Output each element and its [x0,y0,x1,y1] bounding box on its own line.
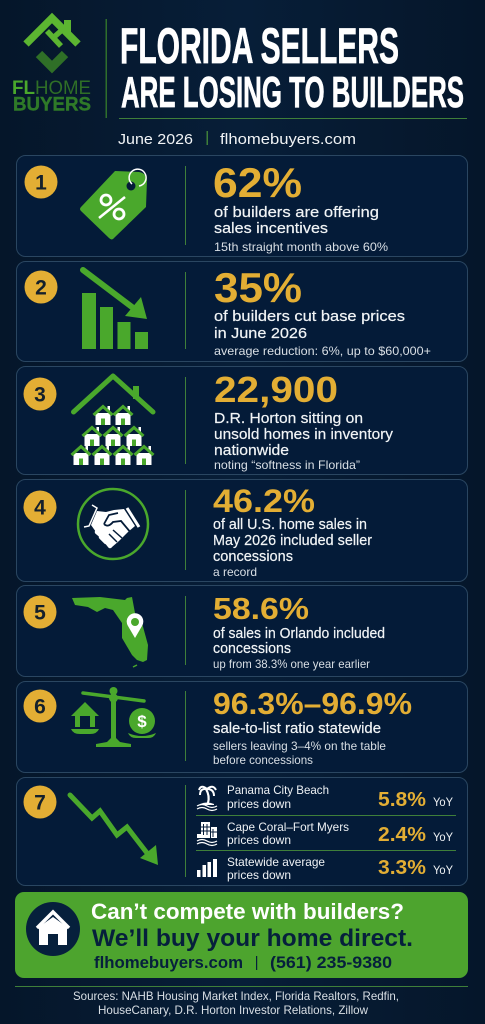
stat text 5: up from 38.3% one year earlier [213,657,370,671]
call to action banner: flhomebuyers.com [94,953,243,972]
panel: stat 1 [16,156,468,256]
call to action banner: Can’t compete with builders? [91,899,404,924]
icon: balance scale with house and dollar [71,687,156,747]
date and website: flhomebuyers.com [220,131,356,148]
stat text 4: concessions [213,548,293,565]
row: Cape Coral–Fort Myers: prices down [227,833,291,847]
panel: stat 4 [16,480,468,582]
sources: Sources: NAHB Housing Market Index, Florida Realtors, Redfin, [73,989,399,1003]
sources [73,989,399,1017]
stat text 1: 15th straight month above 60% [214,240,388,254]
number badge 2 [24,270,58,304]
date and website [118,131,356,148]
number badge 1 [24,166,58,198]
stat text 2 [214,264,431,358]
panel: stat 5 [16,586,468,676]
stat text 3: nationwide [214,442,289,459]
panel: stat 6 [16,682,468,772]
row: Panama City Beach: YoY [433,795,453,809]
stat text 5: of sales in Orlando included [213,625,385,642]
stat text 1: 62% [213,159,302,206]
panel: stat 7 regional price declines [16,778,468,886]
icon: price tag [80,169,147,240]
stat text 6: sellers leaving 3–4% on the table [213,739,386,753]
icon: handshake [78,489,148,559]
row: Panama City Beach: prices down [227,797,291,811]
row: Cape Coral–Fort Myers: YoY [433,830,453,844]
logo: FL Home Buyers [12,18,91,116]
number badge 5 [24,596,56,628]
number badge 1: 1 [35,172,47,194]
row: Panama City Beach [197,783,453,811]
stat text 5: concessions [213,640,291,657]
stat text 3 [214,369,394,472]
number badge 5: 5 [34,602,46,624]
stat text 6: 96.3%–96.9% [213,686,412,721]
number badge 7 [24,786,56,818]
stat text 4: May 2026 included seller [213,532,372,549]
stat text 1: of builders are offering [214,204,379,221]
logo: FL Home Buyers: BUYERS [13,94,91,116]
number badge 6 [24,690,56,722]
row: Statewide average: YoY [433,863,453,877]
number badge 4: 4 [34,496,46,520]
icon: falling bar chart [82,270,148,349]
row: Statewide average: prices down [227,868,291,882]
number badge 2: 2 [35,276,47,300]
stat text 3: 22,900 [214,369,338,410]
stat text 6 [213,686,412,767]
stat text 3: unsold homes in inventory [214,426,394,443]
stat text 1: sales incentives [214,220,328,237]
icon: rising bars [197,859,217,877]
icon: house in circle [26,902,80,956]
number badge 7: 7 [34,792,46,814]
date and website: June 2026 [118,131,193,148]
row: Cape Coral–Fort Myers: 2.4% [378,824,426,846]
icon: zigzag down arrow [70,795,158,865]
icon: waterfront buildings [197,822,217,846]
call to action banner: (561) 235-9380 [270,953,392,972]
stat text 4 [213,483,372,579]
stat text 4: a record [213,565,257,579]
row: Statewide average [197,855,453,882]
title [120,18,464,117]
stat text 2: in June 2026 [214,325,307,342]
row: Statewide average: Statewide average [227,855,325,869]
row: Cape Coral–Fort Myers [197,820,453,847]
number badge 3: 3 [34,384,46,406]
icon: roof over many houses [72,376,154,465]
sources: HouseCanary, D.R. Horton Investor Relations, Zillow [98,1003,368,1017]
stat text 4: of all U.S. home sales in [213,516,367,533]
call to action banner [15,892,468,978]
number badge 4 [24,490,56,524]
stat text 4: 46.2% [213,483,315,519]
row: Cape Coral–Fort Myers: Cape Coral–Fort Myers [227,820,349,834]
stat text 6: sale-to-list ratio statewide [213,720,381,737]
logo: FL Home Buyers: HOME [35,77,91,99]
stat text 2: of builders cut base prices [214,308,405,325]
stat text 3: noting “softness in Florida” [214,458,360,472]
stat text 6: before concessions [213,753,313,767]
stat text 5 [213,591,385,671]
number badge 3 [24,378,56,410]
panel: stat 3 [16,366,468,474]
logo: FL Home Buyers: FL [12,77,35,99]
stat text 2: average reduction: 6%, up to $60,000+ [214,344,431,358]
stat text 1 [213,159,388,254]
icon: Florida map with pin [72,597,148,667]
panel: stat 2 [16,262,468,362]
stat text 5: 58.6% [213,591,309,626]
row: Panama City Beach: Panama City Beach [227,783,329,797]
stat text 2: 35% [214,264,302,311]
row: Panama City Beach: 5.8% [378,789,426,811]
icon: balance scale with house and dollar: $ [137,712,147,731]
icon: palm island [197,787,217,810]
row: Statewide average: 3.3% [378,857,426,879]
number badge 6: 6 [34,696,46,718]
stat text 3: D.R. Horton sitting on [214,410,363,427]
call to action banner: We’ll buy your home direct. [92,925,413,952]
